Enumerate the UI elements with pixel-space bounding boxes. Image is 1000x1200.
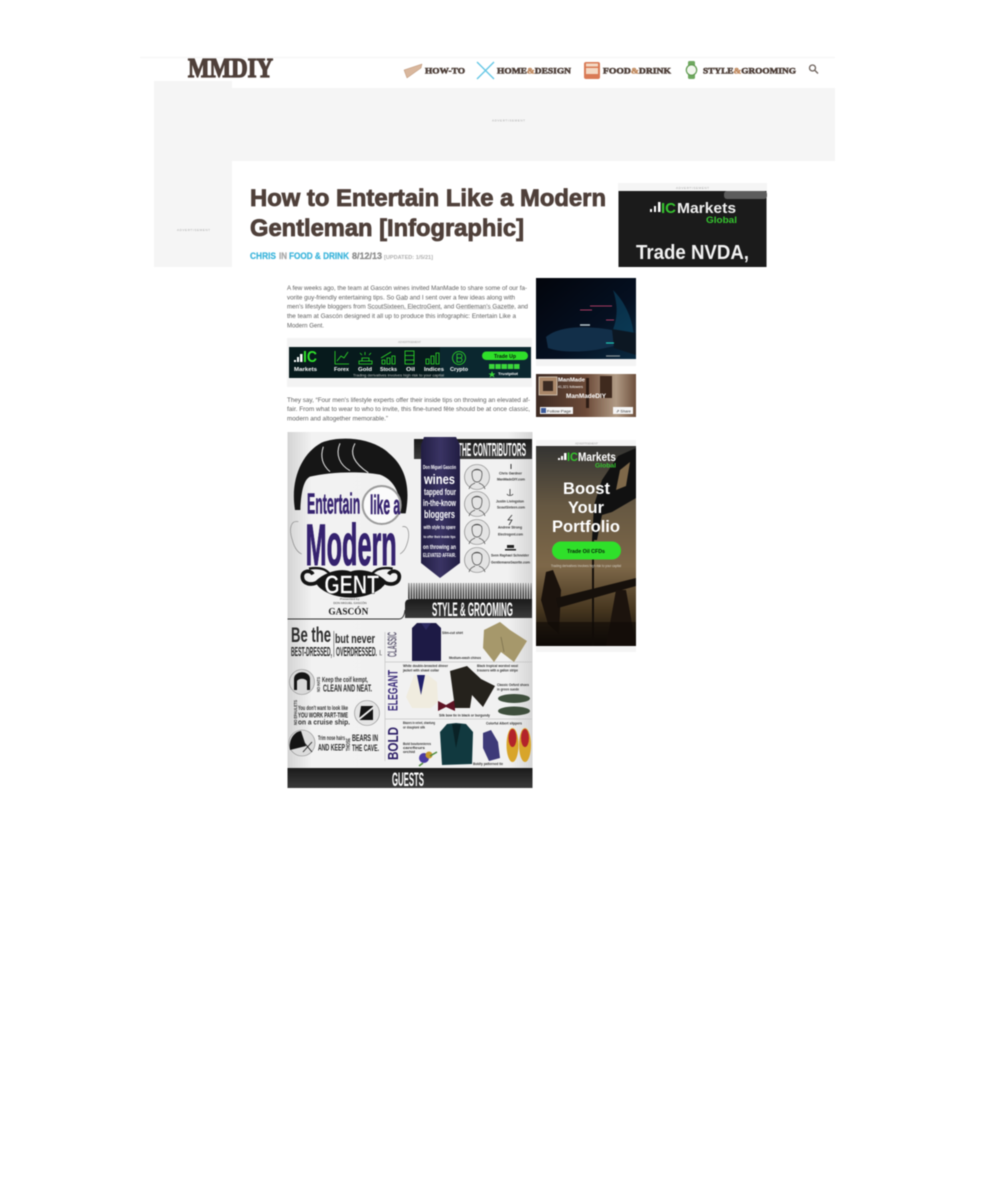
bold: boutonniere: Bold boutonnieres <box>403 742 431 746</box>
tip: hair: CLEAN AND NEAT. <box>323 684 372 694</box>
contributor: justin livingston: Justin Livingston <box>496 500 524 504</box>
necktie with intro text: ELEVATED AFFAIR. <box>423 553 456 559</box>
elegant: black trousers: Black tropical worsted wool <box>477 664 518 668</box>
sidebar oil ad: Trade Oil CFDs <box>567 549 605 555</box>
mustache <box>315 570 387 598</box>
headline: best-dressed: but never <box>335 631 375 646</box>
hero: entertain like a modern gent: Entertain <box>307 488 360 520</box>
banner labels: Crypto <box>450 367 469 373</box>
classic: chinos: Medium-wash chinos <box>449 656 481 660</box>
top right display ad: Trade NVDA, <box>636 242 749 264</box>
logo bars <box>650 202 660 212</box>
ad headline: Boost <box>563 479 610 498</box>
contributor: andrew strong: Andrew Strong <box>498 526 522 530</box>
tip: nose hair: THOSE <box>346 738 352 751</box>
necktie with intro text: with style to spare <box>423 525 456 531</box>
contributor: sven raphael schneider: Sven Raphael Schneider <box>491 554 530 558</box>
tip: hair: Keep the coif kempt, <box>322 675 368 684</box>
elegant: bow tie <box>438 700 490 718</box>
tip: epaulets: on a cruise ship. <box>298 718 350 726</box>
text: THE CONTRIBUTORS <box>458 440 526 460</box>
intro paragraph: men's lifestyle bloggers from ScoutSixteen, ElectroGent, and Gentleman's Gazette, and <box>287 304 528 310</box>
banner disclaimer: Trading derivatives involves high risk to your capital <box>353 374 444 378</box>
sidebar facebook card: Follow Page <box>547 408 572 414</box>
banner button: Trade Up <box>494 354 516 360</box>
bold: velvet blazer: Blazers in velvet, shantung <box>403 721 435 725</box>
banner button <box>482 352 528 360</box>
left advertisement panel: ADVERTISEMENT <box>177 228 210 232</box>
necktie with intro text <box>421 437 460 578</box>
contributor: andrew strong <box>464 515 523 544</box>
trustpilot stars: Trustpilot <box>498 371 519 376</box>
top advertisement panel: ADVERTISEMENT <box>492 118 525 122</box>
necktie with intro text: tapped four <box>424 487 456 497</box>
hero: entertain like a modern gent: Presented by <box>340 597 360 601</box>
hero: entertain like a modern gent: GENT <box>324 569 379 599</box>
headline: best-dressed: Be the <box>291 624 331 647</box>
icon: watch <box>686 61 697 79</box>
banner labels: Forex <box>334 367 350 373</box>
tip: epaulets <box>293 700 380 726</box>
contributor: chris gardner <box>464 464 525 490</box>
contributor: andrew strong: Electrogent.com <box>498 532 523 536</box>
intro paragraph: A few weeks ago, the team at Gascón wines invited ManMade to share some of our fa- <box>287 286 527 292</box>
banner labels: Indices <box>424 367 444 373</box>
classic: shirt: Slim-cut shirt <box>442 631 464 635</box>
sidebar oil ad: Portfolio <box>552 517 620 536</box>
tip: nose hair: THE CAVE. <box>352 743 379 754</box>
top advertisement panel <box>232 88 835 161</box>
icon: crossed tools <box>477 62 494 79</box>
elegant: oxford shoes: in green suede <box>497 688 519 692</box>
article title <box>250 185 606 242</box>
contributors heading <box>414 439 532 460</box>
elegant: dinner jacket: jacket with shawl collar <box>402 668 440 672</box>
tip: epaulets: NO EPAULETS <box>293 700 298 725</box>
tip: nose hair: BEARS IN <box>352 733 378 744</box>
guests banner <box>288 768 532 791</box>
elegant: oxford shoes <box>497 683 530 716</box>
bold: velvet blazer: or doupioni silk <box>403 726 425 730</box>
tip: nose hair: Trim nose hairs <box>318 736 345 742</box>
icon: search <box>810 65 818 74</box>
banner ad <box>287 338 532 387</box>
nav: how-to: HOW-TO <box>425 66 465 76</box>
sidebar oil ad: Trading derivatives involves high risk to your capital <box>551 564 621 568</box>
contributor: sven raphael schneider: GentlemansGazette.com <box>491 560 530 564</box>
byline: FOOD & DRINK <box>289 251 349 261</box>
contributor: sven raphael schneider <box>464 545 530 572</box>
dividers <box>385 632 532 761</box>
tip: epaulets: You don't want to look like <box>298 705 348 712</box>
banner labels: Stocks <box>380 367 397 373</box>
ears <box>291 521 409 554</box>
contributor: justin livingston: ScoutSixteen.com <box>497 506 525 510</box>
byline <box>250 251 433 261</box>
contributor: justin livingston <box>464 489 525 516</box>
sidebar oil ad: Your <box>568 498 604 517</box>
top right display ad: Global <box>706 215 737 225</box>
tip: epaulets: YOU WORK PART-TIME <box>298 710 348 720</box>
label: bold: BOLD <box>385 727 402 760</box>
byline: IN <box>279 251 287 261</box>
contributor: chris gardner: Chris Gardner <box>499 472 523 476</box>
site header <box>140 53 835 83</box>
banner ad: IC <box>303 349 317 366</box>
quote paragraph: modern and altogether memorable.” <box>287 416 388 422</box>
sidebar oil ad: Markets <box>578 450 616 464</box>
banner labels: Oil <box>406 367 416 373</box>
classic: shirt <box>412 623 464 661</box>
elegant: dinner jacket: White double-breasted dinner <box>403 664 449 668</box>
necktie with intro text: on throwing an <box>423 544 456 551</box>
quote paragraph <box>287 398 530 422</box>
sidebar oil ad: IC <box>567 450 578 464</box>
bold: velvet blazer <box>403 721 473 765</box>
infographic: Modern <box>306 513 397 578</box>
hair <box>294 439 407 513</box>
sidebar facebook card: ManMade <box>558 378 585 384</box>
necktie with intro text: Don Miguel Gascón <box>423 465 456 471</box>
tip: nose hair <box>289 730 379 756</box>
ad logo <box>558 453 566 460</box>
sidebar dark image ad <box>536 278 636 366</box>
headline: best-dressed: BEST-DRESSED, <box>291 644 332 659</box>
guests banner: GUESTS <box>392 770 424 791</box>
headline: best-dressed <box>291 624 382 659</box>
style and grooming banner: STYLE & GROOMING <box>432 600 513 621</box>
elegant: black trousers <box>450 664 518 708</box>
quote paragraph: fair. From what to wear to who to invite, this fine-tuned fête should be at once classic, <box>287 407 530 413</box>
intro paragraph: Modern Gent. <box>287 324 324 330</box>
top right display ad: ADVERTISEMENT <box>676 186 709 190</box>
bold: boutonniere: orchid <box>403 750 415 754</box>
infographic: OVERDRESSED. <box>336 644 377 659</box>
banner icons <box>335 351 466 364</box>
monocle <box>363 486 401 524</box>
banner labels: Gold <box>358 367 372 373</box>
left advertisement panel <box>154 81 232 267</box>
sidebar facebook card <box>536 374 636 417</box>
article title: Gentleman [Infographic] <box>250 215 524 242</box>
hero: entertain like a modern gent: DON MIGUEL GASCÓN <box>333 600 367 605</box>
intro paragraph: vorite guy-friendly entertaining tips. So Gab and I sent over a few ideas along with <box>287 296 515 302</box>
sidebar oil ad: ADVERTISEMENT <box>575 442 598 446</box>
bold: boutonniere <box>403 742 437 766</box>
elegant: dinner jacket <box>402 664 449 708</box>
nav: style and grooming: STYLE &GROOMING <box>703 66 796 76</box>
banner labels <box>334 367 469 373</box>
classic: chinos <box>449 622 527 662</box>
banner logo <box>294 354 302 362</box>
quote paragraph: They say, “Four men's lifestyle experts offer their inside tips on throwing an elevated af- <box>287 398 530 404</box>
necktie with intro text: to offer their inside tips <box>424 534 456 539</box>
pumpjack silhouette <box>592 448 636 540</box>
hero: entertain like a modern gent <box>291 439 409 616</box>
icon: saw <box>404 64 422 78</box>
bold: albert slippers: Colorful Albert slippers <box>486 722 522 726</box>
tip: hair <box>290 670 372 694</box>
elegant: black trousers: trousers with a gallon stripe <box>477 668 518 672</box>
top right display ad: IC <box>661 200 676 217</box>
sidebar facebook card: ⇗ Share <box>616 408 632 414</box>
barcode stripes <box>408 583 532 599</box>
intro paragraph: the team at Gascón designed it all up to produce this infographic: Entertain Like a <box>287 314 517 320</box>
sidebar oil ad: Global <box>595 462 616 470</box>
nav: home and design: HOME &DESIGN <box>497 66 571 76</box>
sidebar facebook card: ManMadeDIY <box>566 394 606 400</box>
hero: entertain like a modern gent: GASCÓN <box>328 606 369 616</box>
style and grooming banner <box>288 599 532 621</box>
contributor: chris gardner: ManMadeDIY.com <box>497 478 525 482</box>
bold: patterned tie: Boldly patterned tie <box>473 762 503 766</box>
byline: CHRIS <box>250 251 276 261</box>
hero: entertain like a modern gent: like a <box>370 490 400 520</box>
top right display ad <box>618 183 767 267</box>
icon: whiskey glass <box>584 62 600 79</box>
necktie with intro text: wines <box>423 471 455 487</box>
byline: [UPDATED: 1/5/21] <box>384 255 433 261</box>
bold: albert slippers <box>486 722 531 762</box>
intro paragraph <box>287 286 528 330</box>
top right display ad: Markets <box>677 200 736 217</box>
label: elegant: ELEGANT <box>384 670 400 711</box>
sidebar oil ad <box>536 440 636 652</box>
elegant: oxford shoes: Classic Oxford shoes <box>497 683 529 687</box>
infographic <box>288 432 532 791</box>
necktie with intro text: bloggers <box>424 509 455 521</box>
bold: boutonniere: carefleurs <box>403 746 425 750</box>
article title: How to Entertain Like a Modern <box>250 185 606 212</box>
logo: MMDIY <box>188 53 273 83</box>
bold: patterned tie <box>473 730 503 766</box>
sidebar facebook card: 41,321 followers <box>558 385 583 389</box>
nav: food and drink: FOOD &DRINK <box>603 66 672 76</box>
elegant: bow tie: Silk bow tie in black or burgundy <box>439 714 490 718</box>
tip: hair: NO HATS <box>316 677 321 692</box>
infographic: CLASSIC <box>384 632 400 657</box>
banner ad: Markets <box>294 367 317 373</box>
banner ad: ADVERTISEMENT <box>398 340 421 344</box>
byline: 8/12/13 <box>352 251 382 261</box>
tip: nose hair: AND KEEP <box>318 742 345 752</box>
ad button <box>552 542 621 560</box>
necktie with intro text: in-the-know <box>423 498 457 508</box>
trustpilot stars <box>488 364 520 378</box>
